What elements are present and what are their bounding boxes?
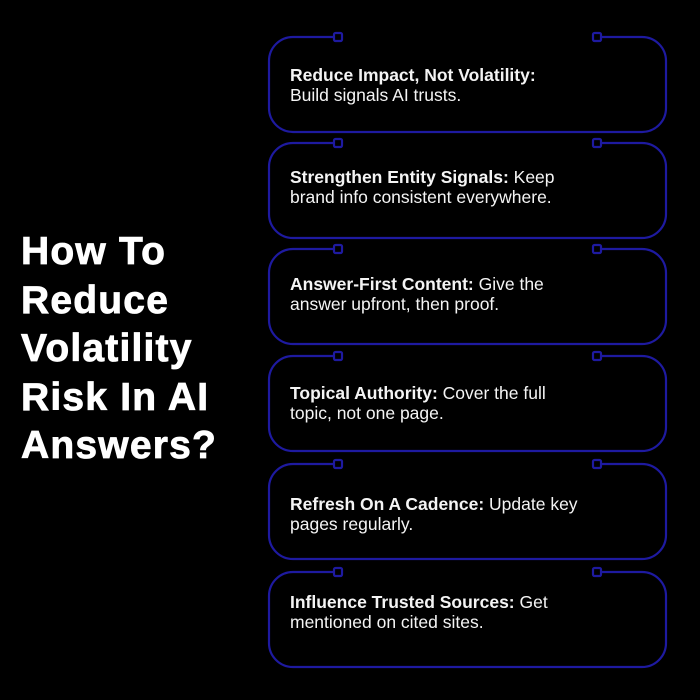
title: Risk In AI [21, 376, 209, 418]
text: card 1: Build signals AI trusts. [290, 85, 461, 105]
text: card 3: Answer-First Content: Give the [290, 274, 544, 294]
title [20, 230, 217, 467]
text: card 6: mentioned on cited sites. [290, 612, 484, 632]
title: How To [21, 230, 166, 273]
text: card 5: Refresh On A Cadence: Update key [290, 494, 578, 514]
card frame 4 [269, 352, 666, 451]
card frame 5 [269, 460, 666, 559]
card frame 6 [269, 568, 666, 667]
text: card 6 [290, 592, 548, 632]
text: card 2 [290, 167, 555, 207]
text: card 1: Reduce Impact, Not Volatility: [290, 65, 536, 85]
text: card 4 [290, 383, 546, 423]
card frame 3 [269, 245, 666, 344]
text: card 4: Topical Authority: Cover the full [290, 383, 546, 403]
text: card 2: brand info consistent everywhere. [290, 187, 552, 207]
title: Reduce [21, 278, 169, 322]
title: Answers? [21, 424, 217, 467]
text: card 4: topic, not one page. [290, 403, 444, 423]
card frame 1 [269, 33, 666, 132]
text: card 5 [290, 494, 578, 534]
text: card 3 [290, 274, 544, 314]
text: card 1 [290, 65, 536, 105]
text: card 3: answer upfront, then proof. [290, 294, 499, 314]
text: card 2: Strengthen Entity Signals: Keep [290, 167, 555, 187]
text: card 5: pages regularly. [290, 514, 413, 534]
text: card 6: Influence Trusted Sources: Get [290, 592, 548, 612]
card frame 2 [269, 139, 666, 238]
title: Volatility [21, 327, 193, 370]
